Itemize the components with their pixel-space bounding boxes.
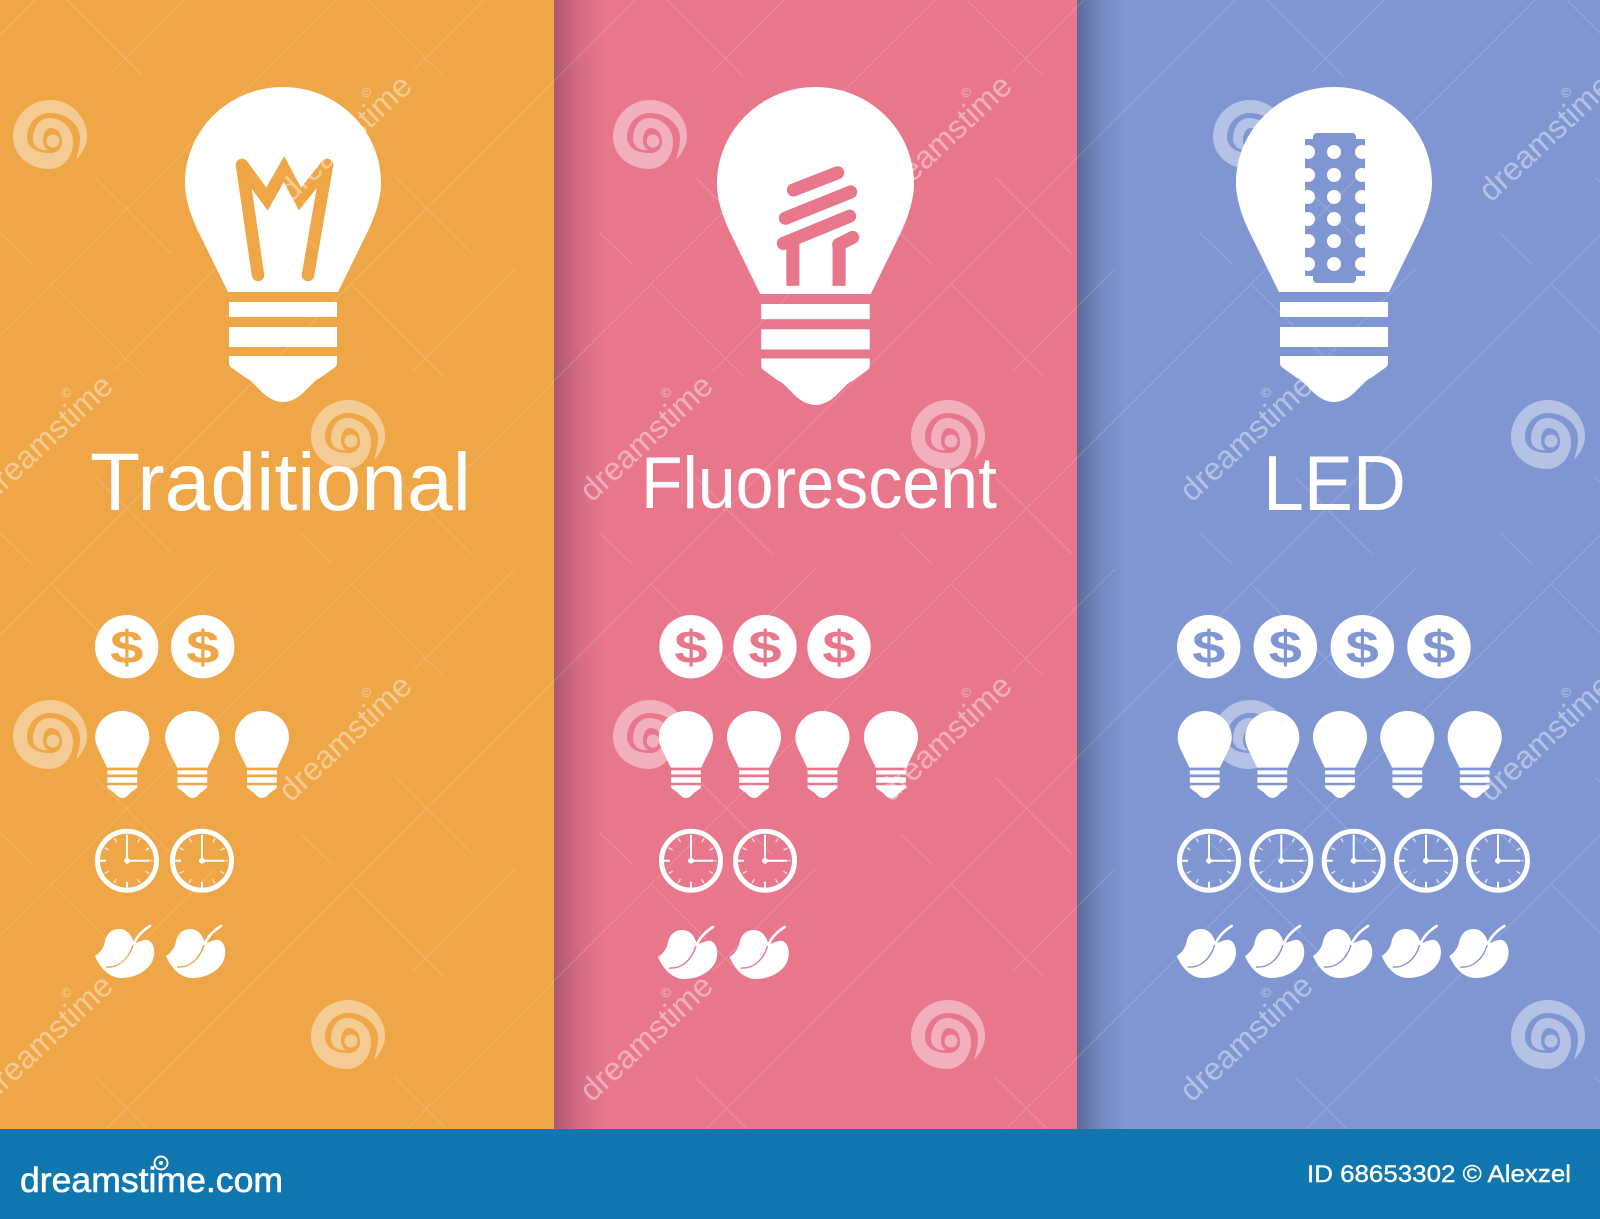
footer image id and credit: ID 68653302 © Alexzel (1307, 1161, 1571, 1188)
cost rating: 2 dollar coins: $ (110, 622, 143, 673)
lifespan rating: 2 clocks (98, 831, 232, 890)
eco rating: 5 leaves (1177, 926, 1509, 978)
watermark overlay: lattice, spirals and dreamstime text: © (661, 385, 671, 400)
heading: Traditional: Traditional (90, 437, 471, 528)
cost rating: 3 dollar coins: $ (748, 622, 782, 673)
watermark overlay: lattice, spirals and dreamstime text: © (361, 85, 371, 100)
heading: LED: LED (1263, 439, 1406, 527)
cost rating: 4 dollar coins: $ (1422, 622, 1456, 673)
cost rating: 4 dollar coins: $ (1269, 622, 1302, 673)
watermark overlay: lattice, spirals and dreamstime text: dreamstime (271, 67, 419, 208)
cost rating: 4 dollar coins: $ (1346, 622, 1379, 673)
footer bar (0, 1129, 1600, 1219)
watermark overlay: lattice, spirals and dreamstime text: © (361, 685, 371, 700)
watermark overlay: lattice, spirals and dreamstime text: © (961, 85, 971, 100)
cost rating: 3 dollar coins: $ (674, 622, 708, 673)
cost rating: 4 dollar coins (1177, 615, 1471, 678)
watermark overlay: lattice, spirals and dreamstime text: © (61, 385, 71, 400)
watermark overlay: lattice, spirals and dreamstime text: © (61, 985, 71, 1000)
watermark overlay: lattice, spirals and dreamstime text: dreamstime (1172, 967, 1320, 1108)
large fluorescent bulb icon with spiral tube (717, 87, 914, 405)
watermark overlay: lattice, spirals and dreamstime text: dreamstime (271, 667, 419, 808)
cost rating: 4 dollar coins: $ (1192, 622, 1225, 673)
large traditional bulb icon with filament (185, 87, 381, 402)
efficiency rating: 3 bulbs (95, 711, 289, 798)
eco rating: 2 leaves (658, 927, 789, 979)
watermark overlay: lattice, spirals and dreamstime text: dreamstime (1172, 367, 1320, 508)
panel: traditional (0, 0, 554, 1129)
cost rating: 2 dollar coins: $ (186, 622, 219, 673)
panel: fluorescent (554, 0, 1077, 1129)
cost rating: 3 dollar coins: $ (822, 622, 856, 673)
cost rating: 2 dollar coins (95, 615, 234, 678)
heading: Fluorescent: Fluorescent (641, 443, 997, 524)
footer logo: dreamstime.com: dreamstime.com (20, 1161, 283, 1200)
efficiency rating: 5 bulbs (1178, 711, 1502, 798)
watermark overlay: lattice, spirals and dreamstime text: dreamstime (572, 367, 720, 508)
watermark overlay: lattice, spirals and dreamstime text: © (661, 985, 671, 1000)
watermark overlay: lattice, spirals and dreamstime text: © (1561, 85, 1571, 100)
watermark overlay: lattice, spirals and dreamstime text: dreamstime (572, 967, 720, 1108)
eco rating: 2 leaves (95, 926, 225, 978)
lifespan rating: 5 clocks (1180, 831, 1528, 890)
watermark overlay: lattice, spirals and dreamstime text: © (1261, 985, 1271, 1000)
cost rating: 3 dollar coins (659, 615, 871, 678)
lifespan rating: 2 clocks (662, 831, 794, 890)
efficiency rating: 4 bulbs (659, 711, 918, 798)
watermark overlay: lattice, spirals and dreamstime text: © (961, 685, 971, 700)
large LED bulb icon with diode board (1236, 87, 1432, 402)
watermark overlay: lattice, spirals and dreamstime text: dreamstime (871, 67, 1019, 208)
watermark overlay: lattice, spirals and dreamstime text: © (1261, 385, 1271, 400)
panel: LED (1077, 0, 1600, 1129)
watermark overlay: lattice, spirals and dreamstime text: dreamstime (871, 667, 1019, 808)
watermark overlay: lattice, spirals and dreamstime text: © (1561, 685, 1571, 700)
